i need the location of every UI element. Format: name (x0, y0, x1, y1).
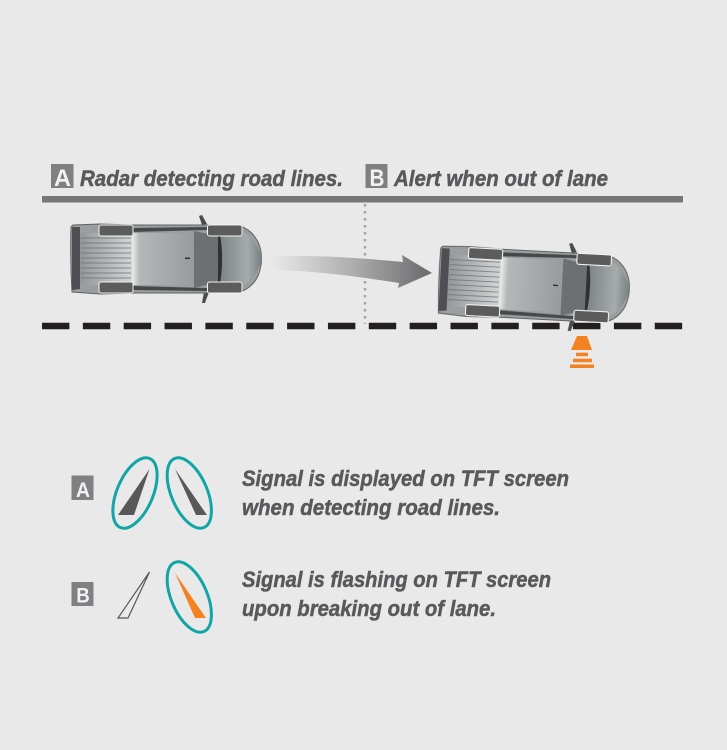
legend row A (72, 451, 569, 535)
legend row A: A (76, 479, 90, 502)
arrow: truck drifting (272, 255, 432, 288)
legend text A: when detecting road lines. (242, 495, 500, 520)
icon: orange lane alert (570, 336, 594, 368)
legend row B (72, 555, 551, 639)
heading B: B (370, 165, 384, 192)
section divider dotted line (364, 204, 366, 324)
heading A: A (54, 165, 71, 192)
legend text B: Signal is flashing on TFT screen (242, 567, 551, 592)
heading B: Alert when out of lane (393, 166, 608, 191)
icon: right lane signal flashing (158, 555, 221, 639)
legend text B: upon breaking out of lane. (242, 596, 496, 621)
icon: right lane signal on (158, 451, 221, 535)
icon: left lane signal on (104, 451, 166, 535)
road top edge (42, 196, 683, 202)
heading A: Radar detecting road lines. (80, 166, 343, 191)
truck A (71, 215, 262, 303)
legend row B: B (76, 584, 90, 608)
truck B (436, 236, 632, 334)
lane dashed line (42, 323, 683, 329)
legend text A: Signal is displayed on TFT screen (242, 466, 569, 491)
icon: left lane signal outline (118, 572, 150, 618)
